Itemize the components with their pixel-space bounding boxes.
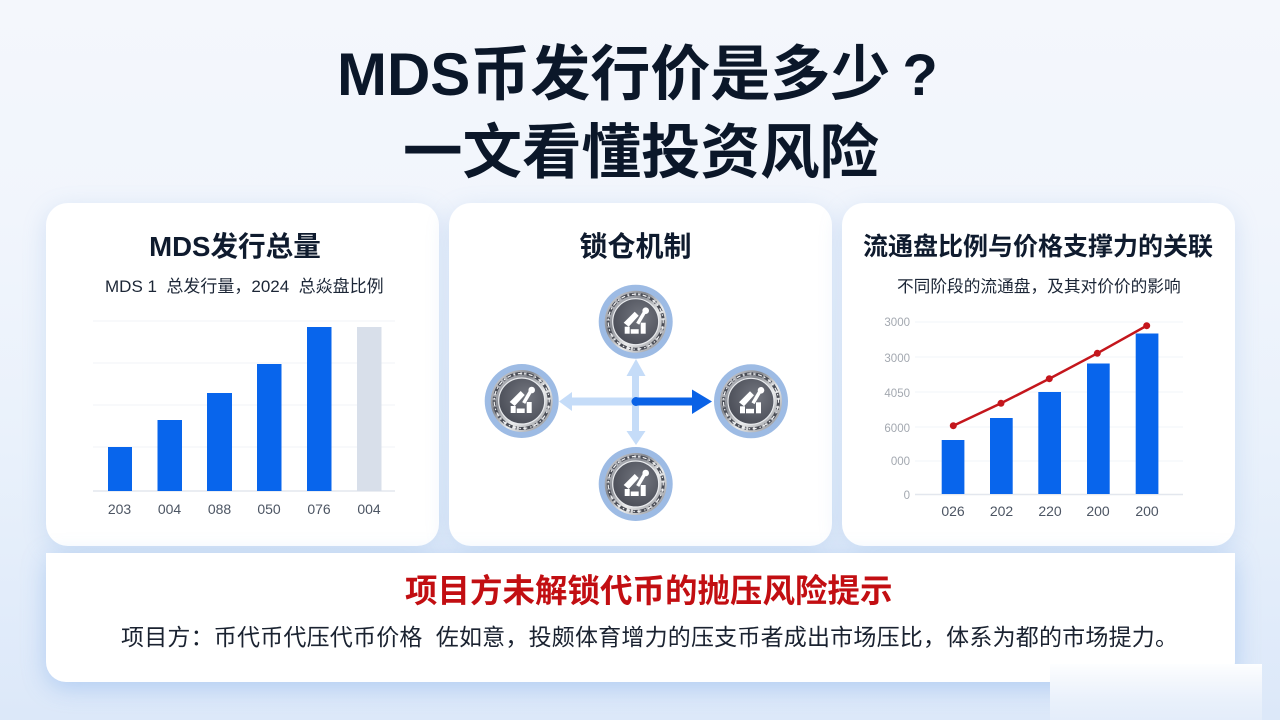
bar chart: supply: 203 xyxy=(108,501,131,517)
combo chart: float and price: 220 xyxy=(1038,503,1062,519)
combo chart: float and price: 202 xyxy=(990,503,1013,519)
coin: right xyxy=(714,364,788,438)
combo chart: float and price: 4050 xyxy=(884,388,910,400)
bar chart: supply: 004 xyxy=(357,501,381,517)
bar chart: supply: 088 xyxy=(208,501,231,517)
combo chart: float and price: 3000 xyxy=(884,317,910,329)
bar chart: supply xyxy=(93,320,395,517)
combo chart: float and price xyxy=(884,317,1183,519)
bar chart: supply: 050 xyxy=(257,501,281,517)
subtitle: float ratio: 不同阶段的流通盘，及其对价价的影响 xyxy=(897,277,1181,296)
combo chart: float and price: 0 xyxy=(904,490,910,502)
combo chart: float and price: 200 xyxy=(1135,503,1159,519)
coin: bottom xyxy=(599,447,673,521)
combo chart: float and price: 026 xyxy=(941,503,965,519)
watermark patch xyxy=(1050,664,1262,720)
lock-up diagram xyxy=(484,284,788,521)
arrow: active blue xyxy=(632,390,712,414)
panel: float ratio and price support xyxy=(842,203,1235,546)
title: MDS币发行价是多少? xyxy=(337,41,938,108)
heading: lock-up mechanism: 锁仓机制 xyxy=(579,231,692,262)
panel: MDS total supply xyxy=(46,203,439,546)
coin: left xyxy=(485,364,559,438)
subtitle: supply: MDS 1 总发行量，2024 总焱盘比例 xyxy=(105,277,384,296)
combo chart: float and price: 000 xyxy=(891,456,910,468)
light arrows xyxy=(559,359,646,445)
coin: top xyxy=(599,285,673,359)
combo chart: float and price: 6000 xyxy=(884,423,910,435)
warning heading: 项目方未解锁代币的抛压风险提示 xyxy=(405,573,893,609)
title: 一文看懂投资风险 xyxy=(403,119,879,186)
heading: float ratio: 流通盘比例与价格支撑力的关联 xyxy=(863,233,1213,261)
heading: MDS total supply: MDS发行总量 xyxy=(149,231,321,262)
combo chart: float and price: 200 xyxy=(1086,503,1110,519)
panel: sell pressure warning xyxy=(46,553,1235,682)
bar chart: supply: 076 xyxy=(307,501,331,517)
warning text: 项目方：币代币代压代币价格 佐如意，投颇体育增力的压支币者成出市场压比，体系为都的市场提力。 xyxy=(121,624,1178,650)
bar chart: supply: 004 xyxy=(158,501,181,517)
combo chart: float and price: 3000 xyxy=(884,353,910,365)
panel: lock-up mechanism xyxy=(449,203,832,546)
title xyxy=(337,41,938,186)
